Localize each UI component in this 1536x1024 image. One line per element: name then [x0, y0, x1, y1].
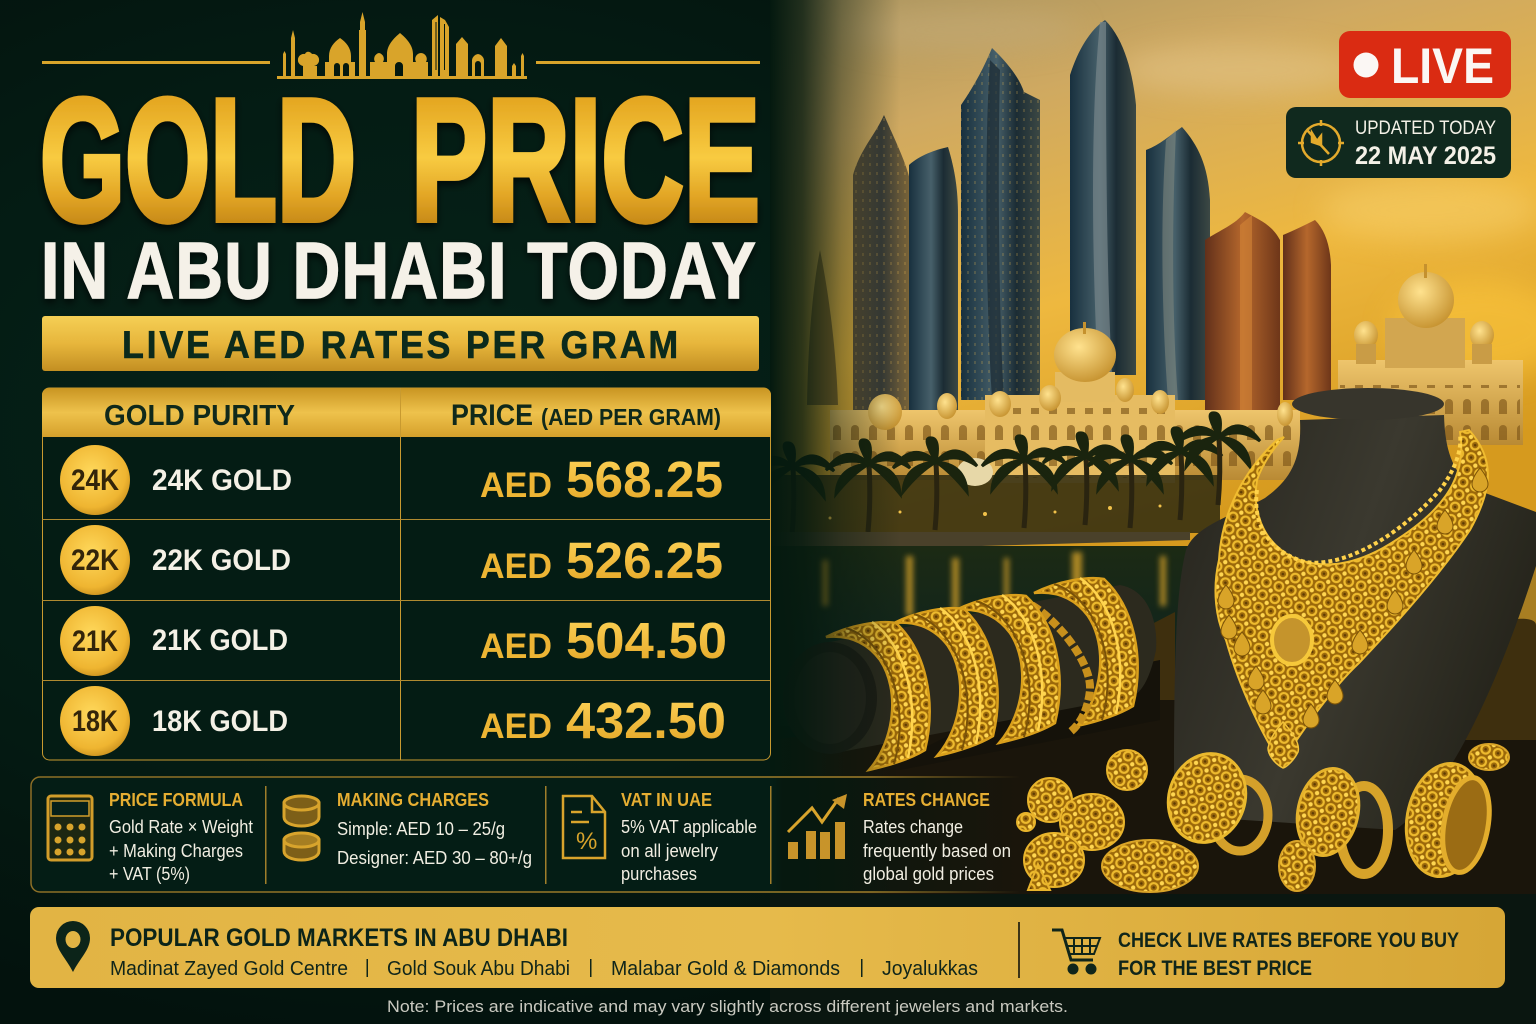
- panel: price formula: + VAT (5%): [109, 864, 190, 884]
- panel: price formula: + Making Charges: [109, 841, 243, 861]
- title: GOLD PRICE: GOLD: [40, 62, 356, 257]
- table header: (AED PER GRAM): [541, 404, 721, 430]
- waterfront quay: [770, 532, 1190, 552]
- palm trees: [750, 413, 1260, 535]
- row: 22K: 22K GOLD: [152, 544, 291, 577]
- gold markets bar: [30, 907, 1505, 988]
- price table: [42, 388, 771, 760]
- row: 24K: 24K: [71, 464, 119, 497]
- row: 22K: 526.25: [566, 532, 723, 589]
- panel: VAT in UAE: on all jewelry: [621, 841, 718, 861]
- footnote: Note: Prices are indicative and may vary slightly across different jewelers and markets.: [387, 997, 1068, 1016]
- panel: making charges: Simple: AED 10 – 25/g: [337, 819, 505, 839]
- icon: VAT document: [563, 796, 605, 858]
- table header: PRICE: [451, 399, 533, 432]
- necklace: [1215, 430, 1488, 768]
- row: 21K: [60, 606, 727, 676]
- panel: rates change: Rates change: [863, 817, 963, 837]
- gold markets bar: Malabar Gold & Diamonds: [611, 958, 840, 980]
- panel: price formula: Gold Rate × Weight: [109, 817, 253, 837]
- row: 21K: AED: [480, 627, 552, 666]
- gold markets bar: Gold Souk Abu Dhabi: [387, 958, 570, 980]
- row: 21K: 21K: [72, 625, 118, 658]
- icon: VAT document: %: [576, 828, 597, 855]
- row: 24K: 24K GOLD: [152, 464, 292, 497]
- gold rings: [1102, 743, 1509, 892]
- clouds: [840, 10, 1536, 380]
- tabletop: [770, 690, 1536, 900]
- row: 18K: AED: [480, 707, 552, 746]
- bottom band: [770, 894, 1536, 1024]
- title: IN ABU DHABI TODAY: IN ABU DHABI TODAY: [41, 226, 757, 315]
- gold markets bar: FOR THE BEST PRICE: [1118, 957, 1312, 980]
- panel: VAT in UAE: purchases: [621, 864, 697, 884]
- row: 21K: 504.50: [566, 612, 727, 669]
- row: 22K: 22K: [71, 544, 119, 577]
- panel: making charges: [284, 790, 532, 868]
- right palace: [1338, 264, 1523, 445]
- header ornament: gold skyline and rules: [42, 12, 760, 79]
- gold markets bar: CHECK LIVE RATES BEFORE YOU BUY: [1118, 929, 1459, 952]
- info strip: [31, 777, 1020, 892]
- panel: making charges: Designer: AED 30 – 80+/g: [337, 848, 532, 868]
- photo: Abu Dhabi skyline at sunset: [750, 0, 1536, 1024]
- row: 24K: [60, 445, 723, 515]
- row: 18K: 18K: [72, 705, 118, 738]
- earrings: [1017, 750, 1147, 890]
- icon: location pin: [56, 921, 90, 972]
- table header: [42, 388, 771, 437]
- row: 24K: AED: [480, 466, 552, 505]
- panel: VAT in UAE: 5% VAT applicable: [621, 817, 757, 837]
- row: 22K: AED: [480, 547, 552, 586]
- title: GOLD PRICE: [40, 62, 760, 257]
- gold markets bar: Madinat Zayed Gold Centre: [110, 958, 348, 980]
- updated date badge: [1286, 107, 1511, 178]
- skyscrapers: [807, 20, 1331, 420]
- LIVE badge: [1339, 31, 1511, 98]
- table header: GOLD PURITY: [104, 400, 295, 432]
- title: GOLD PRICE: PRICE: [411, 62, 760, 257]
- bangle holder: [783, 585, 1160, 770]
- subtitle band: [42, 316, 759, 371]
- icon: rising chart: [788, 794, 847, 859]
- panel: rates change: frequently based on: [863, 841, 1011, 861]
- panel: rates change: [788, 790, 1011, 884]
- row: 18K: 18K GOLD: [152, 705, 288, 738]
- icon: clock: [1298, 120, 1344, 166]
- row: 21K: 21K GOLD: [152, 624, 288, 657]
- left fade: [770, 0, 900, 894]
- gold bangles: [826, 578, 1138, 770]
- panel: price formula: PRICE FORMULA: [109, 790, 243, 810]
- panel: making charges: MAKING CHARGES: [337, 790, 489, 810]
- icon: calculator: [48, 796, 92, 860]
- row: 22K: [60, 525, 723, 595]
- gold markets bar: POPULAR GOLD MARKETS IN ABU DHABI: [110, 924, 568, 952]
- central palace: [830, 322, 1300, 483]
- water with reflections: [770, 546, 1536, 726]
- panel: VAT in UAE: [563, 790, 757, 884]
- jewelry bust: [1174, 388, 1536, 830]
- icon: shopping cart: [1052, 930, 1100, 973]
- updated date badge: 22 MAY 2025: [1355, 142, 1496, 170]
- row: 18K: [60, 686, 726, 756]
- icon: gold coins: [284, 796, 319, 860]
- panel: rates change: global gold prices: [863, 864, 994, 884]
- gold markets bar: Joyalukkas: [882, 958, 978, 980]
- panel: rates change: RATES CHANGE: [863, 790, 990, 810]
- panel: price formula: [48, 790, 253, 884]
- row: 18K: 432.50: [566, 692, 726, 749]
- panel: VAT in UAE: VAT IN UAE: [621, 790, 712, 810]
- row: 24K: 568.25: [566, 451, 723, 508]
- subtitle band: LIVE AED RATES PER GRAM: [122, 324, 681, 367]
- updated date badge: UPDATED TODAY: [1355, 118, 1496, 139]
- LIVE badge: LIVE: [1391, 38, 1494, 94]
- sky: [770, 0, 1536, 560]
- drape: [1150, 612, 1536, 740]
